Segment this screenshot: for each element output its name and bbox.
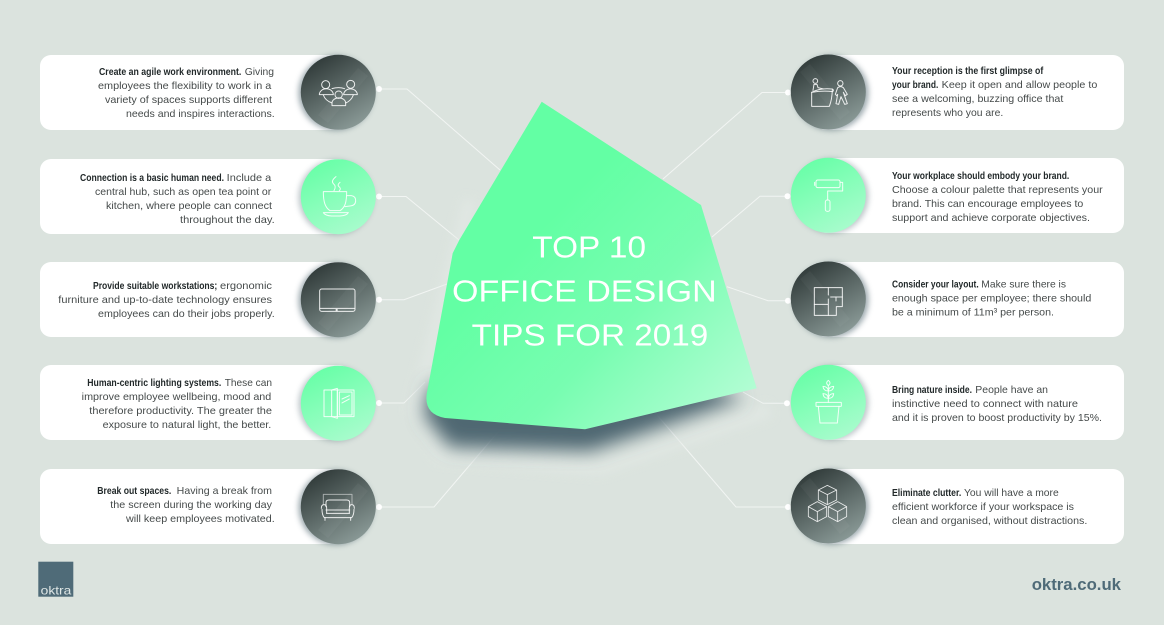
card 8: layout: Consider your layout.: [892, 279, 979, 291]
card 2: connection: [40, 159, 376, 235]
card 6: reception: your brand.: [892, 79, 938, 91]
card 10: clutter: [791, 468, 1124, 544]
icon: meeting people: [319, 80, 357, 106]
icon: floor plan: [814, 288, 842, 315]
card 6: reception: Keep it open and allow people to: [942, 79, 1097, 91]
card 9: nature: People have an: [975, 384, 1048, 396]
card 3: workstations: employees can do their jobs properly.: [98, 308, 275, 320]
icon: sofa: [321, 494, 354, 520]
card 2: connection: central hub, such as open tea point or: [95, 186, 272, 198]
card 8: layout: [791, 262, 1124, 338]
card 7: embody your brand: [791, 158, 1124, 234]
card 10: clutter: efficient workforce if your workspace is: [892, 501, 1074, 513]
central polygon: [426, 102, 757, 429]
card 4: lighting: These can: [225, 377, 272, 389]
card 9: nature: and it is proven to boost productivity by 15%.: [892, 412, 1102, 424]
card 7: embody your brand: Your workplace should embody your brand.: [892, 170, 1069, 182]
logo: [38, 562, 73, 598]
card 2: connection: Include a: [227, 172, 271, 184]
title: [452, 229, 717, 353]
logo: oktra: [41, 584, 72, 598]
card 8: layout: be a minimum of 11m³ per person.: [892, 307, 1054, 319]
card 8: layout: Make sure there is: [981, 279, 1066, 291]
icon: paint roller: [815, 180, 843, 211]
card 9: nature: Bring nature inside.: [892, 384, 972, 396]
website url: oktra.co.uk: [1032, 575, 1122, 594]
icon: plant pot: [816, 380, 841, 423]
card 10: clutter: Eliminate clutter.: [892, 487, 961, 499]
card 1: agile work environment: employees the flexibility to work in a: [98, 80, 271, 92]
card 10: clutter: clean and organised, without distractions.: [892, 515, 1087, 527]
card 9: nature: [791, 365, 1124, 440]
card 4: lighting: therefore productivity. The greater the: [89, 405, 272, 417]
connector lines: [379, 89, 788, 507]
central shape shadow: [424, 385, 744, 451]
card 6: reception: see a welcoming, buzzing office that: [892, 93, 1063, 105]
card 4: lighting: improve employee wellbeing, mood and: [82, 391, 271, 403]
card 6: reception: [791, 54, 1124, 130]
card 1: agile work environment: Create an agile work environment.: [99, 66, 241, 78]
card 6: reception: represents who you are.: [892, 107, 1003, 119]
icon: reception desk: [812, 79, 847, 106]
card 3: workstations: ergonomic: [220, 280, 272, 292]
card 5: break out spaces: the screen during the working day: [110, 499, 273, 511]
card 6: reception: Your reception is the first glimpse of: [892, 65, 1044, 77]
card 1: agile work environment: Giving: [245, 66, 274, 78]
title: TIPS FOR 2019: [472, 318, 708, 353]
card 5: break out spaces: Break out spaces.: [97, 485, 171, 497]
icon: cup: [323, 177, 356, 216]
card 5: break out spaces: will keep employees motivated.: [125, 513, 275, 525]
card 8: layout: enough space per employee; there should: [892, 293, 1091, 305]
card 3: workstations: Provide suitable workstations;: [93, 280, 217, 292]
card 4: lighting: Human-centric lighting systems.: [87, 377, 221, 389]
card 4: lighting: exposure to natural light, the better.: [103, 419, 271, 431]
connector dots: [376, 86, 791, 510]
card 5: break out spaces: [40, 469, 376, 545]
icon: window: [324, 388, 354, 418]
card 7: embody your brand: brand. This can encourage employees to: [892, 198, 1083, 210]
card 1: agile work environment: variety of spaces supports different: [105, 94, 272, 106]
card 7: embody your brand: support and achieve corporate objectives.: [892, 212, 1090, 224]
card 3: workstations: [40, 262, 376, 338]
icon: tablet: [320, 289, 355, 311]
card 2: connection: kitchen, where people can connect: [106, 200, 272, 212]
card 4: lighting: [40, 365, 376, 442]
card 1: agile work environment: needs and inspires interactions.: [126, 108, 275, 120]
title: OFFICE DESIGN: [452, 273, 717, 308]
card 2: connection: Connection is a basic human need.: [80, 172, 224, 184]
card 5: break out spaces: Having a break from: [177, 485, 272, 497]
title: TOP 10: [532, 229, 646, 264]
card 3: workstations: furniture and up-to-date technology ensures: [58, 294, 272, 306]
card 9: nature: instinctive need to connect with nature: [892, 398, 1078, 410]
icon: stacked boxes: [808, 485, 847, 522]
card 7: embody your brand: Choose a colour palette that represents your: [892, 184, 1103, 196]
card 1: agile work environment: [40, 55, 376, 130]
card 10: clutter: You will have a more: [964, 487, 1059, 499]
card 2: connection: throughout the day.: [180, 214, 275, 226]
central shape glow: [415, 200, 770, 468]
